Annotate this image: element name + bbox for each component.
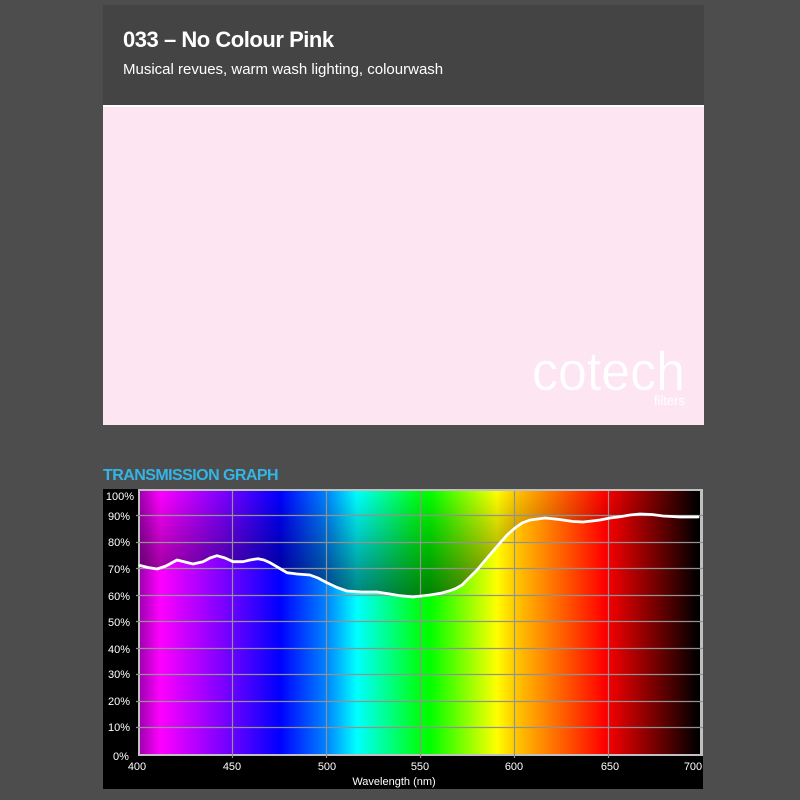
- spectrum: [140, 491, 700, 754]
- grid lines: [136, 491, 703, 758]
- panel: filter colour swatch: [103, 105, 704, 425]
- y axis labels: 20%: [108, 696, 130, 708]
- transmission curve: [140, 514, 698, 597]
- heading: transmission graph: TRANSMISSION GRAPH: [103, 467, 278, 484]
- logo: cotech filters: filters: [654, 393, 685, 408]
- y axis labels: 0%: [113, 751, 129, 763]
- x axis labels: [128, 761, 702, 773]
- title: 033 – No Colour Pink: [123, 27, 334, 52]
- subtitle: Musical revues, warm wash lighting, colourwash: [123, 61, 443, 78]
- y axis labels: 50%: [108, 617, 130, 629]
- y axis labels: 90%: [108, 511, 130, 523]
- chart: transmission graph: [103, 489, 703, 789]
- shaded area above curve: [140, 491, 700, 597]
- y axis labels: 80%: [108, 537, 130, 549]
- x axis labels: 500: [318, 761, 336, 773]
- x axis labels: 650: [601, 761, 619, 773]
- y axis labels: [106, 491, 134, 763]
- x axis labels: 400: [128, 761, 146, 773]
- y axis labels: 60%: [108, 591, 130, 603]
- panel: header: [103, 5, 704, 105]
- x axis labels: 600: [505, 761, 523, 773]
- logo: cotech filters: cotech: [532, 340, 685, 402]
- x axis labels: 450: [223, 761, 241, 773]
- x axis title: Wavelength (nm): [352, 776, 436, 788]
- y axis labels: 70%: [108, 564, 130, 576]
- x axis labels: 700: [684, 761, 702, 773]
- y axis labels: 30%: [108, 669, 130, 681]
- y axis labels: 100%: [106, 491, 134, 503]
- y axis labels: 40%: [108, 644, 130, 656]
- x axis labels: 550: [411, 761, 429, 773]
- chart frame: [138, 489, 703, 756]
- y axis labels: 10%: [108, 722, 130, 734]
- chart background: [103, 489, 703, 789]
